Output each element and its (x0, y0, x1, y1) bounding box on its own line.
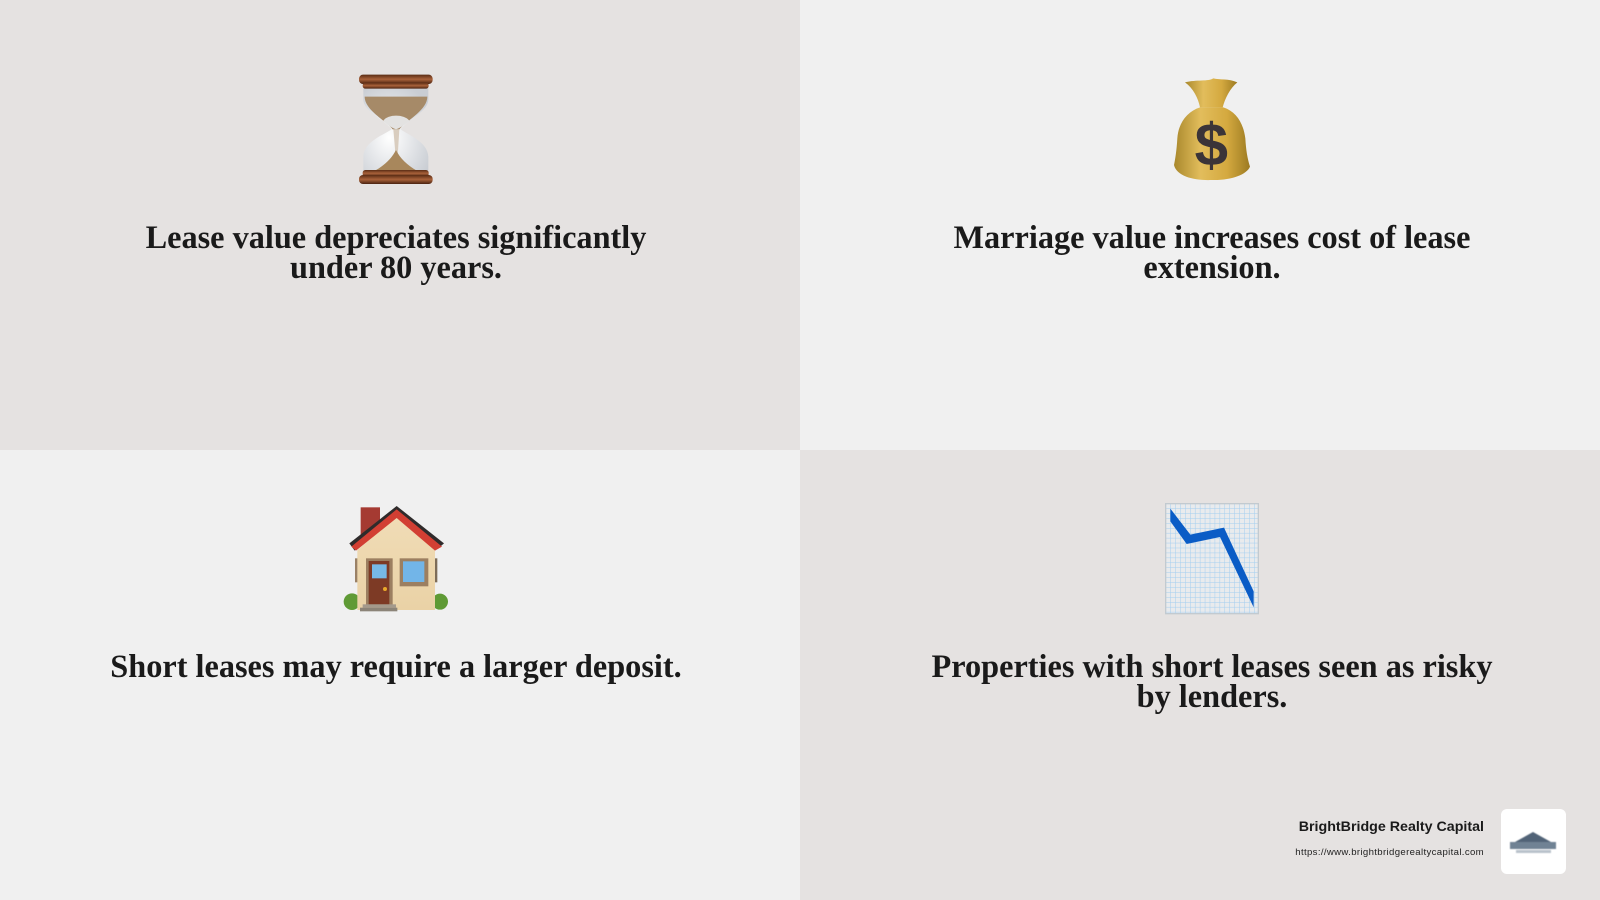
icon: falling chart (1165, 503, 1259, 614)
brand block (1295, 809, 1566, 874)
icon: money bag (1174, 78, 1250, 180)
heading: marriage value: extension. (1143, 249, 1281, 285)
heading: lease value (146, 219, 646, 285)
brand url: https://www.brightbridgerealtycapital.com (1295, 846, 1484, 858)
heading: lease value: under 80 years. (290, 249, 502, 285)
icon: hourglass (358, 74, 433, 184)
heading: lender risk: Properties with short leases seen as risky (932, 648, 1492, 684)
heading: marriage value (954, 219, 1470, 285)
logo card (1501, 809, 1566, 874)
brand name: BrightBridge Realty Capital (1299, 818, 1484, 834)
panel: lender risk (800, 450, 1600, 900)
heading: lease value: Lease value depreciates significantly (146, 219, 646, 255)
panel: marriage value (800, 0, 1600, 450)
heading: marriage value: Marriage value increases cost of lease (954, 219, 1470, 255)
panel: lease value (0, 0, 800, 450)
icon: house (344, 506, 448, 612)
heading: lender risk: by lenders. (1137, 678, 1287, 714)
icon: logo (1509, 831, 1557, 854)
icon: money bag: $ (1195, 111, 1228, 178)
panel: deposit (0, 450, 800, 900)
heading: deposit: Short leases may require a larger deposit. (110, 648, 682, 684)
heading: lender risk (932, 648, 1492, 714)
